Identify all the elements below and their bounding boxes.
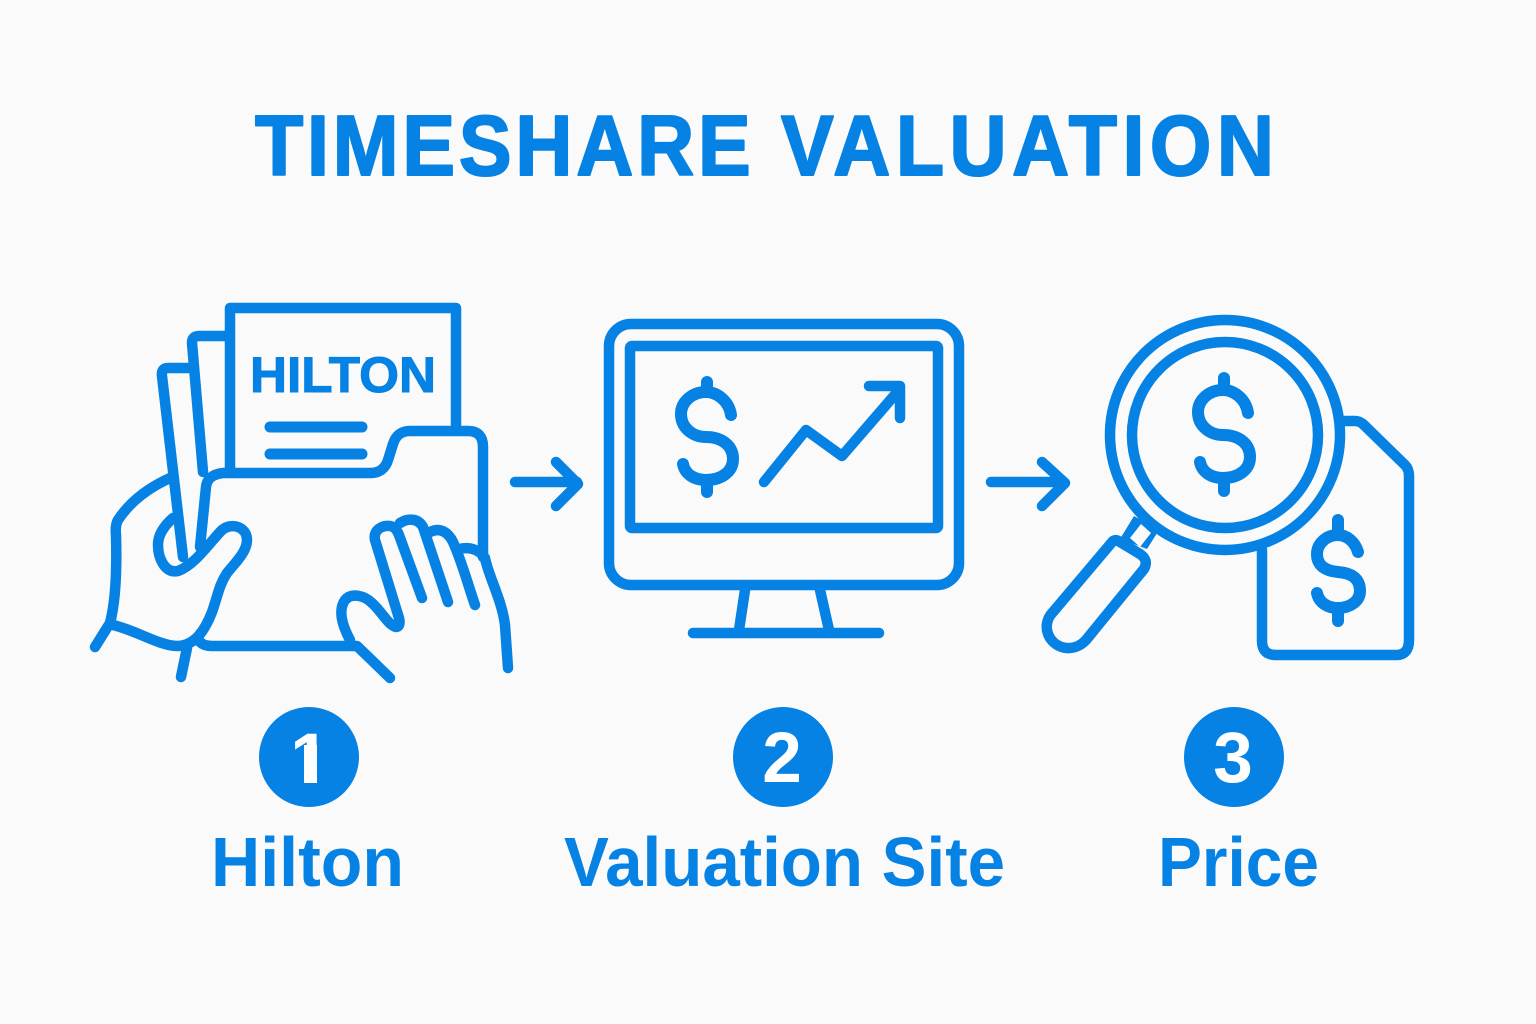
lens rings	[1110, 320, 1340, 550]
step 1 badge	[259, 707, 359, 807]
title	[255, 99, 1274, 194]
title: TIMESHARE	[255, 99, 751, 194]
icon: front document	[230, 308, 456, 468]
icon: Hilton folder held by two hands	[95, 308, 508, 678]
monitor frame	[609, 324, 959, 585]
step 3 label: Price	[1158, 823, 1319, 901]
step 2 label: Valuation Site	[564, 823, 1005, 901]
icon: right hand	[341, 520, 508, 668]
arrow: step two to three	[991, 462, 1065, 506]
step 3 badge: 3	[1213, 719, 1253, 798]
step 2 badge: 2	[762, 719, 802, 798]
title: VALUATION	[781, 99, 1274, 194]
step 1 badge: 1	[290, 720, 330, 799]
magnifier neck	[1120, 516, 1159, 549]
icon: folder	[200, 431, 483, 678]
step 3 badge	[1184, 707, 1284, 807]
step 2 badge	[733, 707, 833, 807]
rising line chart	[764, 386, 900, 482]
price tag	[1262, 421, 1409, 655]
magnifier handle	[1047, 540, 1146, 648]
icon: left hand	[95, 478, 247, 677]
lens dollar sign	[1198, 378, 1250, 491]
icon: magnifying glass over price tag	[1047, 320, 1409, 655]
Hilton document label: HILTON	[250, 347, 436, 403]
arrow: step one to two	[515, 462, 578, 506]
step 1 label: Hilton	[211, 823, 404, 901]
monitor stand	[693, 590, 879, 633]
monitor screen	[630, 346, 938, 528]
icon: back pages	[162, 336, 228, 557]
document text lines	[270, 427, 362, 454]
tag dollar sign	[1317, 520, 1360, 621]
icon: monitor with rising chart	[609, 324, 959, 633]
dollar sign	[681, 382, 733, 492]
